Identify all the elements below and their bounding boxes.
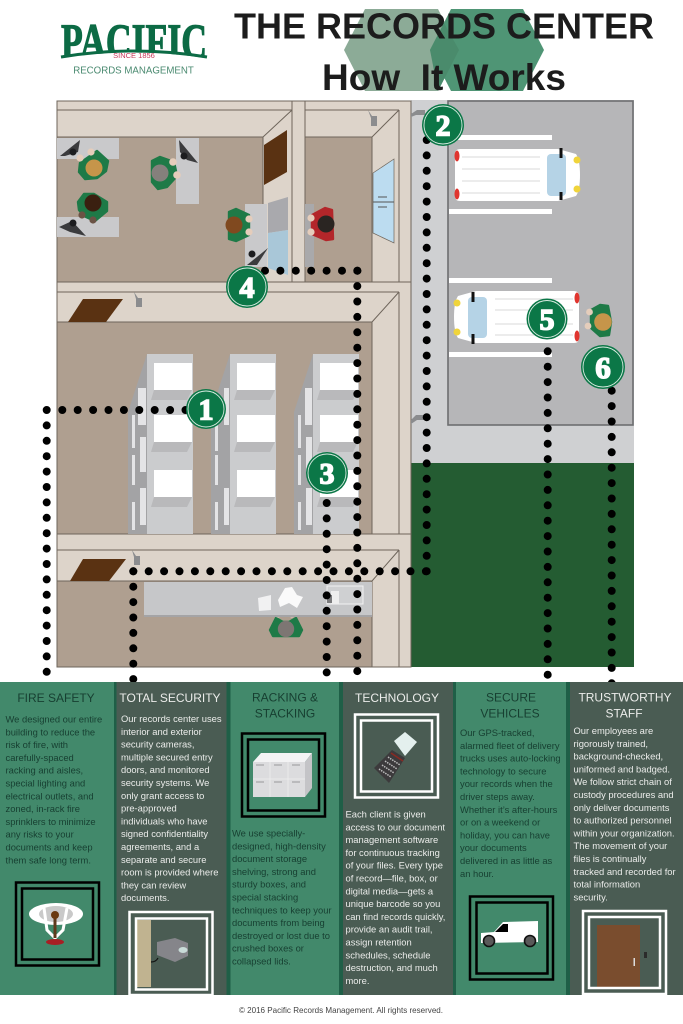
text: trustworthy staff: security. [574, 891, 608, 902]
text: fire safety: documents and keep [6, 842, 93, 852]
window: reception [268, 197, 288, 275]
logo: Pacific Records Management: SINCE 1856 [113, 51, 155, 60]
text: technology: provide an audit trail, [346, 924, 433, 935]
text: racking and stacking: collapsed lids. [232, 956, 291, 966]
text: racking and stacking: sturdy boxes, and [232, 879, 306, 890]
text: total security: individuals who have [121, 815, 208, 826]
text: technology: management software [346, 834, 438, 845]
review counter with papers and box [144, 582, 372, 617]
text: technology: unique barcode so you [346, 898, 440, 909]
text: fire safety: special lighting and [6, 778, 85, 788]
rack 2 [211, 354, 276, 534]
panel: fire safety [0, 682, 114, 995]
icon: delivery van [470, 896, 553, 980]
badge 1: 1 [198, 394, 214, 426]
text: total security: room is provided where [121, 867, 218, 878]
text: total security: documents. [121, 892, 169, 903]
text: technology: Each client is given [346, 808, 426, 820]
text: trustworthy staff: The movement of your [574, 840, 667, 851]
badge 5: 5 [540, 304, 554, 336]
person: desk 1 [76, 148, 108, 179]
security cameras [132, 110, 425, 565]
text: trustworthy staff: background-checked, [574, 751, 663, 762]
text: fire safety: We designed our entire [6, 714, 102, 724]
text: trustworthy staff: We follow strict chain of [574, 776, 672, 787]
heading: secure vehicles: SECURE [486, 690, 536, 704]
text: secure vehicles: alarmed fleet of delivery [460, 740, 560, 751]
text: total security: they can review [121, 879, 186, 890]
person: review room [270, 610, 302, 637]
heading: trustworthy staff: TRUSTWORTHY [578, 690, 672, 704]
text: total security: doors, and monitored [121, 764, 210, 775]
text: technology: access to our document [346, 821, 445, 832]
text: racking and stacking: document storage [232, 853, 307, 864]
text: total security: interior and exterior [121, 726, 202, 737]
panel: racking and stacking [230, 682, 339, 995]
dotted route lines [47, 140, 612, 684]
text: total security: separate and secure [121, 854, 206, 865]
door: office [264, 130, 287, 185]
text: technology: schedules, schedule [346, 949, 430, 960]
text: trustworthy staff: custody procedures and [574, 789, 674, 800]
text: total security: Our records center uses [121, 713, 222, 724]
badge 4: 4 [240, 272, 254, 304]
text: secure vehicles: Whether it’s after-hours [460, 804, 558, 815]
icon: stacked boxes [242, 734, 325, 816]
text: fire safety: sprinklers to minimize [6, 816, 96, 827]
parking lot and sidewalk [411, 100, 634, 464]
text: fire safety: any risks to your [6, 829, 74, 840]
text: racking and stacking: special stacking [232, 892, 298, 902]
heading: fire safety: FIRE SAFETY [17, 691, 95, 705]
logo: Pacific Records Management: RECORDS MANAGEMENT [73, 66, 194, 76]
icon: security camera [130, 912, 212, 995]
text: technology: of record—file, box, or [346, 872, 438, 884]
text: technology: of your files. Every type [346, 860, 443, 871]
heading: total security: TOTAL SECURITY [119, 691, 221, 705]
van: parked top [454, 148, 580, 201]
text: total security: only grant access to [121, 790, 204, 801]
text: fire safety: electrical outlets, and [6, 790, 94, 801]
text: racking and stacking: techniques to keep your [232, 904, 332, 915]
window: lobby door [373, 159, 394, 243]
text: trustworthy staff: within your organization. [572, 827, 675, 838]
icon: barcode scanner [355, 714, 438, 798]
door: records room [68, 299, 123, 322]
heading: trustworthy staff: STAFF [605, 706, 643, 720]
text: secure vehicles: an hour. [460, 868, 494, 879]
heading: racking and stacking: RACKING & [252, 690, 318, 704]
text: secure vehicles: holiday, you can have [460, 829, 550, 840]
text: racking and stacking: shelving, strong and [232, 866, 316, 877]
text: secure vehicles: your documents [460, 842, 527, 853]
heading: technology: TECHNOLOGY [355, 691, 439, 705]
text: secure vehicles: your records when the [460, 778, 553, 789]
icon: fire sprinkler [16, 882, 99, 966]
desks and monitors [57, 138, 314, 267]
text: trustworthy staff: files is continually [574, 853, 647, 864]
building walls [57, 101, 411, 667]
panel: total security [116, 682, 226, 995]
text: fire safety: risk of fire, with [6, 739, 68, 750]
heading: secure vehicles: VEHICLES [480, 706, 540, 720]
text: trustworthy staff: only deliver documents [574, 802, 670, 813]
van: parked bottom [454, 291, 580, 344]
text: total security: security cameras, [121, 739, 194, 750]
title with hexagons: THE RECORDS CENTER [234, 6, 654, 46]
badge 2 [422, 104, 464, 146]
badge 6 [581, 345, 625, 389]
text: secure vehicles: or on a weekend or [460, 817, 540, 828]
person: desk 2 [78, 194, 107, 224]
rack 3 [294, 354, 359, 534]
text: technology: can find records quickly, [346, 911, 445, 922]
text: fire safety: zoned, in-rack fire [6, 803, 80, 814]
text: trustworthy staff: rigorously trained, [574, 738, 648, 749]
text: fire safety: building to reduce the [6, 726, 95, 737]
text: fire safety: racking and aisles, [6, 765, 83, 776]
text: secure vehicles: driver steps away. [460, 791, 535, 802]
text: total security: agreements, and a [121, 841, 200, 852]
text: secure vehicles: technology to secure [460, 765, 547, 776]
text: fire safety: carefully-spaced [6, 752, 74, 763]
text: fire safety: them safe long term. [6, 854, 91, 865]
person: driver [585, 305, 612, 336]
person: reception staff [226, 209, 253, 241]
text: racking and stacking: crushed boxes or [232, 943, 304, 954]
text: trustworthy staff: tracked and recorded for [574, 866, 676, 877]
text: secure vehicles: Our GPS-tracked, [460, 727, 535, 738]
text: racking and stacking: designed, high-density [232, 840, 326, 851]
badge 5 [526, 298, 568, 340]
text: technology: more. [346, 975, 369, 986]
text: technology: digital media—gets a [346, 885, 434, 896]
text: total security: security systems. We [121, 777, 209, 788]
panel: secure vehicles [456, 682, 566, 995]
text: technology: assign retention [346, 936, 412, 948]
icon: secure door [583, 911, 666, 994]
logo: Pacific Records Management: PACIFIC [61, 13, 207, 69]
storage racks [128, 354, 359, 534]
text: trustworthy staff: Our employees are [574, 725, 653, 736]
badge 4 [226, 266, 268, 308]
heading: racking and stacking: STACKING [255, 706, 315, 720]
title with hexagons: How It Works [322, 57, 566, 98]
text: trustworthy staff: uniformed and badged. [574, 763, 670, 774]
text: total security: signed confidentiality [121, 828, 208, 839]
door: review room [70, 559, 126, 581]
text: racking and stacking: We use specially- [232, 828, 305, 838]
person: visitor [307, 208, 334, 240]
badge 1 [186, 389, 226, 429]
site plan [47, 100, 634, 684]
text: technology: destruction, and much [346, 962, 438, 973]
badge 6: 6 [595, 350, 611, 385]
title with hexagons [234, 6, 654, 98]
text: total security: pre-approved [121, 803, 177, 814]
text: secure vehicles: trucks uses auto-locking [460, 753, 561, 764]
badge 3 [306, 452, 348, 494]
staff figures [76, 148, 335, 637]
footer copyright: © 2016 Pacific Records Management. All rights reserved. [239, 1006, 443, 1015]
badge 3: 3 [320, 458, 334, 490]
person: desk 3 [152, 157, 181, 189]
text: technology: for continuous tracking [346, 847, 440, 858]
text: total security: multiple secured entry [121, 751, 213, 762]
text: racking and stacking: destroyed or lost due to [232, 930, 330, 941]
text: trustworthy staff: total information [574, 879, 640, 890]
panel band background [0, 682, 683, 995]
panel: technology [343, 682, 453, 995]
lawn [411, 463, 634, 667]
badge 2: 2 [436, 110, 450, 142]
text: racking and stacking: documents from being [232, 917, 325, 928]
text: trustworthy staff: to authorized personnel [574, 815, 671, 826]
rack 1 [128, 354, 193, 534]
panel: trustworthy staff [570, 682, 683, 995]
text: secure vehicles: delivered in as little as [460, 855, 553, 866]
